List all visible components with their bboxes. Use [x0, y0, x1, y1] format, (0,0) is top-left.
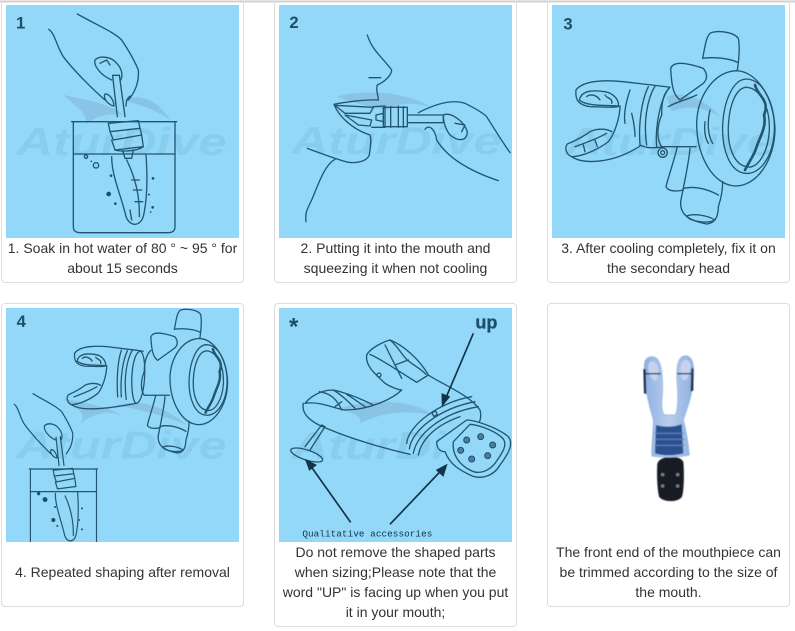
arrow: to bite plate — [390, 464, 447, 524]
caption: note: when sizing;Please note that the — [295, 564, 496, 580]
illustration: mouthpiece fixed on secondary regulator — [552, 5, 785, 238]
illustration: hand dipping mouthpiece in beaker — [6, 5, 239, 238]
illustration: mouthpiece with qualitative accessories — [279, 308, 512, 542]
panel: step 1 soak card — [1, 0, 244, 283]
caption: note: Do not remove the shaped parts — [295, 544, 496, 560]
illustration: squeezing mouthpiece in mouth: AturDive — [290, 119, 502, 163]
panel: step 4 reshape card — [1, 303, 244, 607]
illustration: repeat shaping: AturDive — [15, 423, 227, 467]
panel: note card — [274, 303, 517, 627]
illustration: squeezing mouthpiece in mouth — [279, 5, 512, 238]
photo: translucent blue mouthpiece — [642, 354, 695, 502]
illustration: hand dipping mouthpiece in beaker: AturDive — [15, 120, 227, 164]
number 1: 1 — [16, 14, 25, 33]
number 4: 4 — [17, 312, 27, 331]
caption: trimming note — [556, 544, 781, 600]
caption: trimming note: be trimmed according to the size of — [560, 564, 777, 580]
caption: step 1 — [8, 240, 238, 276]
caption: step 3: the secondary head — [607, 260, 730, 276]
caption: trimming note: The front end of the mouthpiece can — [556, 544, 781, 560]
caption: step 3 — [561, 240, 776, 276]
arrow: up indicator — [442, 333, 473, 407]
caption: note: word "UP" is facing up when you put — [283, 584, 508, 600]
caption: note: it in your mouth; — [346, 604, 445, 620]
illustration: mouthpiece fixed on secondary regulator: AturDive — [564, 120, 775, 164]
caption: trimming note: the mouth. — [635, 584, 702, 600]
caption: step 2: 2. Putting it into the mouth and — [301, 240, 490, 256]
caption: step 1: 1. Soak in hot water of 80 ° ~ 95 ° for — [8, 240, 237, 256]
label: up: up — [475, 312, 497, 332]
caption: step 1: about 15 seconds — [67, 260, 178, 276]
panel: step 3 fix card — [547, 0, 790, 283]
arrow: to T-pin — [305, 459, 351, 522]
number 3: 3 — [563, 14, 573, 33]
caption: step 2: squeezing it when not cooling — [304, 260, 487, 276]
panel: product photo card — [547, 303, 790, 607]
illustration: repeat shaping — [6, 308, 239, 542]
mouthpiece drawing — [289, 340, 511, 477]
caption: step 3: 3. After cooling completely, fix it on — [561, 240, 776, 256]
panel: step 2 mouth card — [274, 0, 517, 283]
number 2: 2 — [289, 13, 299, 32]
caption: step 4: 4. Repeated shaping after removal — [15, 564, 230, 580]
illustration: mouthpiece with qualitative accessories: AturDive — [290, 424, 502, 468]
asterisk: * — [289, 313, 299, 340]
mouthpiece — [67, 346, 145, 409]
regulator head — [141, 309, 228, 453]
caption: note — [282, 544, 508, 620]
label: qualitative accessories: Qualitative accessories — [302, 529, 432, 540]
beaker and hand — [14, 394, 98, 552]
caption: step 2 — [301, 240, 490, 276]
